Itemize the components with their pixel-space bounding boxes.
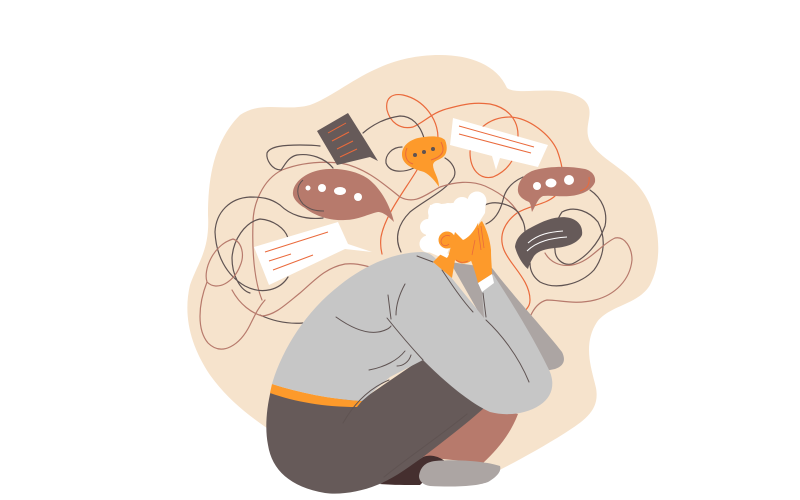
brown scribble: right tangle — [530, 238, 632, 317]
brown scribble: large arc — [253, 162, 522, 300]
ear — [438, 232, 456, 248]
dark scribble: by hair — [485, 177, 525, 232]
far trouser shadow — [380, 456, 445, 485]
dark scribble: right tangle — [530, 190, 606, 286]
speech bubble: dark right — [515, 217, 582, 269]
cuff — [478, 274, 494, 292]
dark scribble: top — [363, 116, 424, 138]
clothing fold lines — [336, 256, 529, 477]
neck and face — [433, 223, 480, 278]
red scribble: centre — [381, 170, 417, 254]
speech bubble: white left — [254, 222, 372, 285]
dark scribble: upper left loop — [267, 145, 333, 170]
dark scribble: loop behind orange bubble — [386, 147, 414, 171]
trousers — [266, 358, 484, 494]
brown scribble: lower left — [232, 264, 370, 316]
brown scribble: left loops — [200, 239, 265, 349]
sweater — [272, 252, 552, 414]
speech bubble: white right — [450, 118, 548, 170]
face and finger lines — [441, 226, 484, 262]
person — [266, 192, 564, 494]
tangled thought lines — [200, 95, 632, 349]
dark scribble: left loops — [215, 197, 323, 323]
waistband — [270, 384, 362, 407]
speech bubble: dark note — [317, 113, 378, 165]
hair — [420, 192, 486, 256]
red scribble: right — [502, 196, 555, 311]
hands — [470, 221, 492, 283]
speech bubble: orange — [402, 136, 447, 187]
hair tuft by neck — [439, 251, 449, 258]
background blob — [187, 55, 658, 485]
red scribble: top loops — [387, 95, 562, 178]
dark scribble: centre — [398, 158, 455, 252]
far arm — [450, 262, 564, 372]
leg — [423, 405, 518, 463]
shoe — [419, 460, 500, 487]
speech bubble: brown right — [518, 167, 595, 212]
speech bubble: brown left — [293, 169, 394, 222]
